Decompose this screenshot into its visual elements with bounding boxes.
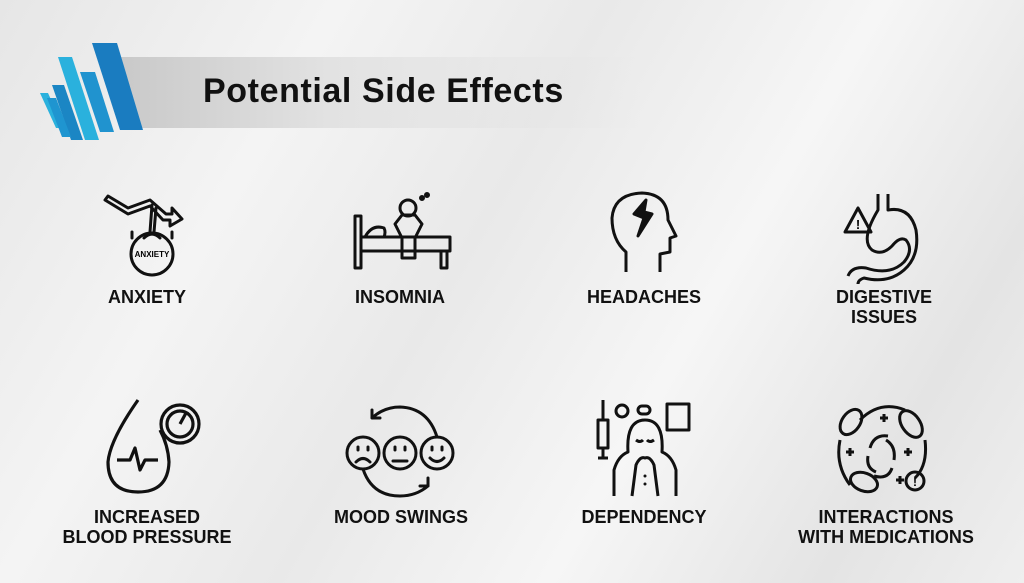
label: digestive issues: DIGESTIVE <box>836 287 932 307</box>
label: interactions with medications: INTERACTIONS <box>818 507 954 527</box>
label: increased blood pressure: INCREASED <box>94 507 200 527</box>
icon: anxiety weight: ANXIETY <box>135 250 170 259</box>
label: interactions with medications <box>798 507 974 547</box>
label: anxiety: ANXIETY <box>108 287 186 307</box>
header band <box>120 57 640 128</box>
label: insomnia: INSOMNIA <box>355 287 445 307</box>
label: headaches: HEADACHES <box>587 287 701 307</box>
logo: blue bars <box>40 43 143 140</box>
label: dependency: DEPENDENCY <box>581 507 707 527</box>
label: interactions with medications: WITH MEDICATIONS <box>798 527 974 547</box>
label: increased blood pressure: BLOOD PRESSURE <box>62 527 232 547</box>
title: Potential Side Effects <box>203 72 564 110</box>
label: increased blood pressure <box>62 507 232 547</box>
label: digestive issues <box>836 287 932 327</box>
label: digestive issues: ISSUES <box>851 307 917 327</box>
icon: interactions: ! <box>913 475 917 489</box>
label: mood swings: MOOD SWINGS <box>334 507 468 527</box>
icon: stomach: ! <box>856 217 860 232</box>
